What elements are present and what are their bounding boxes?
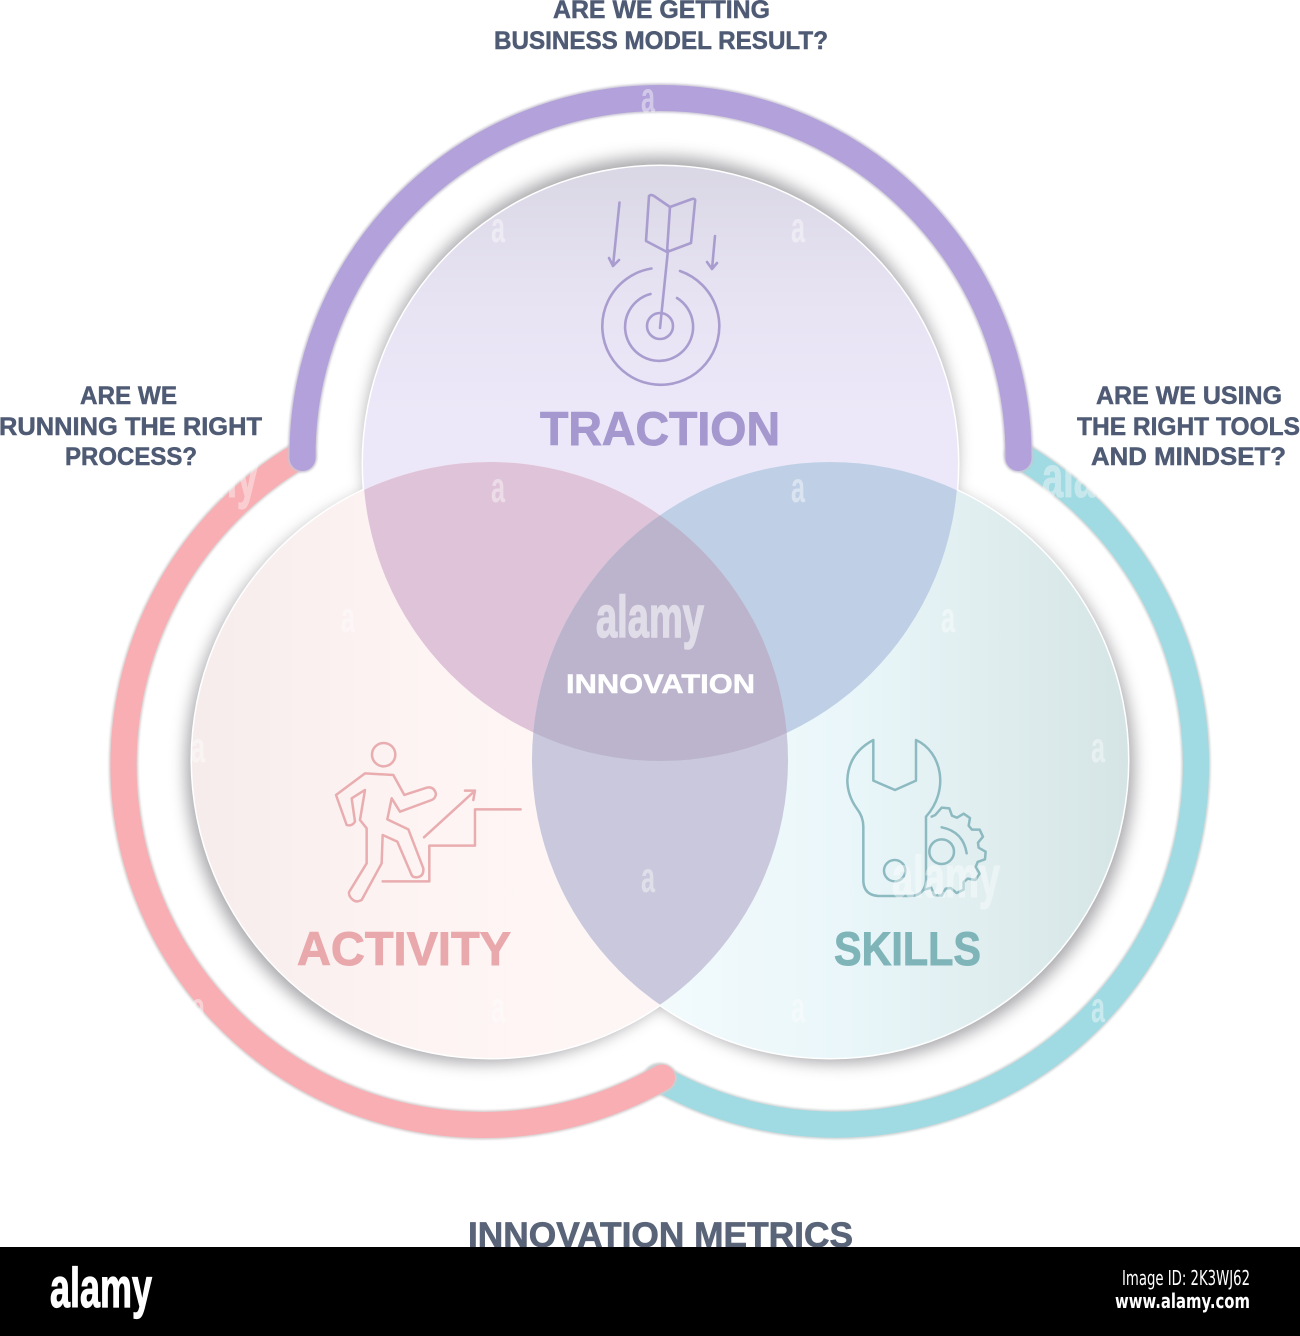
icon: person climbing steps: [336, 743, 521, 901]
heading: skills: SKILLS: [834, 922, 981, 975]
watermarks: a: [491, 204, 506, 252]
footer bar: [0, 1247, 1300, 1336]
watermarks: a: [491, 464, 506, 512]
watermarks: a: [191, 724, 206, 772]
watermarks: a: [641, 854, 656, 902]
question: right process: PROCESS?: [65, 443, 197, 471]
watermarks: a: [491, 984, 506, 1032]
venn circle: skills: [532, 462, 1128, 1058]
heading: traction: TRACTION: [540, 402, 780, 455]
footer logo: alamy: [50, 1256, 152, 1319]
overlap: activity and skills: [532, 732, 788, 1004]
question: right process: RUNNING THE RIGHT: [0, 413, 262, 441]
question: right process: ARE WE: [80, 382, 177, 410]
watermarks: alamy: [1042, 445, 1150, 510]
venn circle: activity: [192, 462, 788, 1058]
watermarks: a: [791, 204, 806, 252]
question: business model result: BUSINESS MODEL RESULT?: [494, 27, 828, 55]
question: tools and mindset: ARE WE USING: [1096, 382, 1282, 410]
question: tools and mindset: [1077, 382, 1300, 471]
watermarks: a: [641, 74, 656, 122]
question: right process: [0, 382, 262, 471]
overlap: traction and skills: [660, 462, 957, 733]
watermarks: a: [191, 984, 206, 1032]
watermarks: alamy: [596, 585, 704, 650]
watermarks: [150, 74, 1150, 1032]
footer url: www.alamy.com: [1115, 1289, 1250, 1313]
title: innovation metrics: INNOVATION METRICS: [468, 1216, 853, 1255]
purple outer arc: traction: [302, 98, 1019, 458]
watermarks: a: [941, 594, 956, 642]
circle shadows: [186, 157, 1134, 1063]
question: tools and mindset: AND MINDSET?: [1091, 443, 1286, 471]
label: innovation: INNOVATION: [566, 669, 755, 699]
watermarks: alamy: [150, 445, 258, 510]
watermarks: alamy: [892, 845, 1000, 910]
watermarks: a: [791, 464, 806, 512]
venn circle: traction: [363, 166, 958, 761]
icon: wrench and gear: [847, 740, 986, 896]
heading: activity: ACTIVITY: [297, 922, 511, 975]
watermarks: a: [1091, 724, 1106, 772]
icon: arrow hitting target: [602, 195, 719, 385]
pink outer arc: activity: [124, 454, 662, 1125]
overlap: centre innovation: [534, 516, 787, 761]
watermarks: a: [1091, 984, 1106, 1032]
circle highlight rims: [190, 164, 1130, 1060]
watermarks: a: [791, 984, 806, 1032]
teal outer arc: skills: [658, 454, 1196, 1125]
overlap: traction and activity: [364, 462, 660, 732]
watermarks: a: [341, 594, 356, 642]
question: tools and mindset: THE RIGHT TOOLS: [1077, 413, 1300, 441]
question: business model result: [494, 0, 828, 55]
